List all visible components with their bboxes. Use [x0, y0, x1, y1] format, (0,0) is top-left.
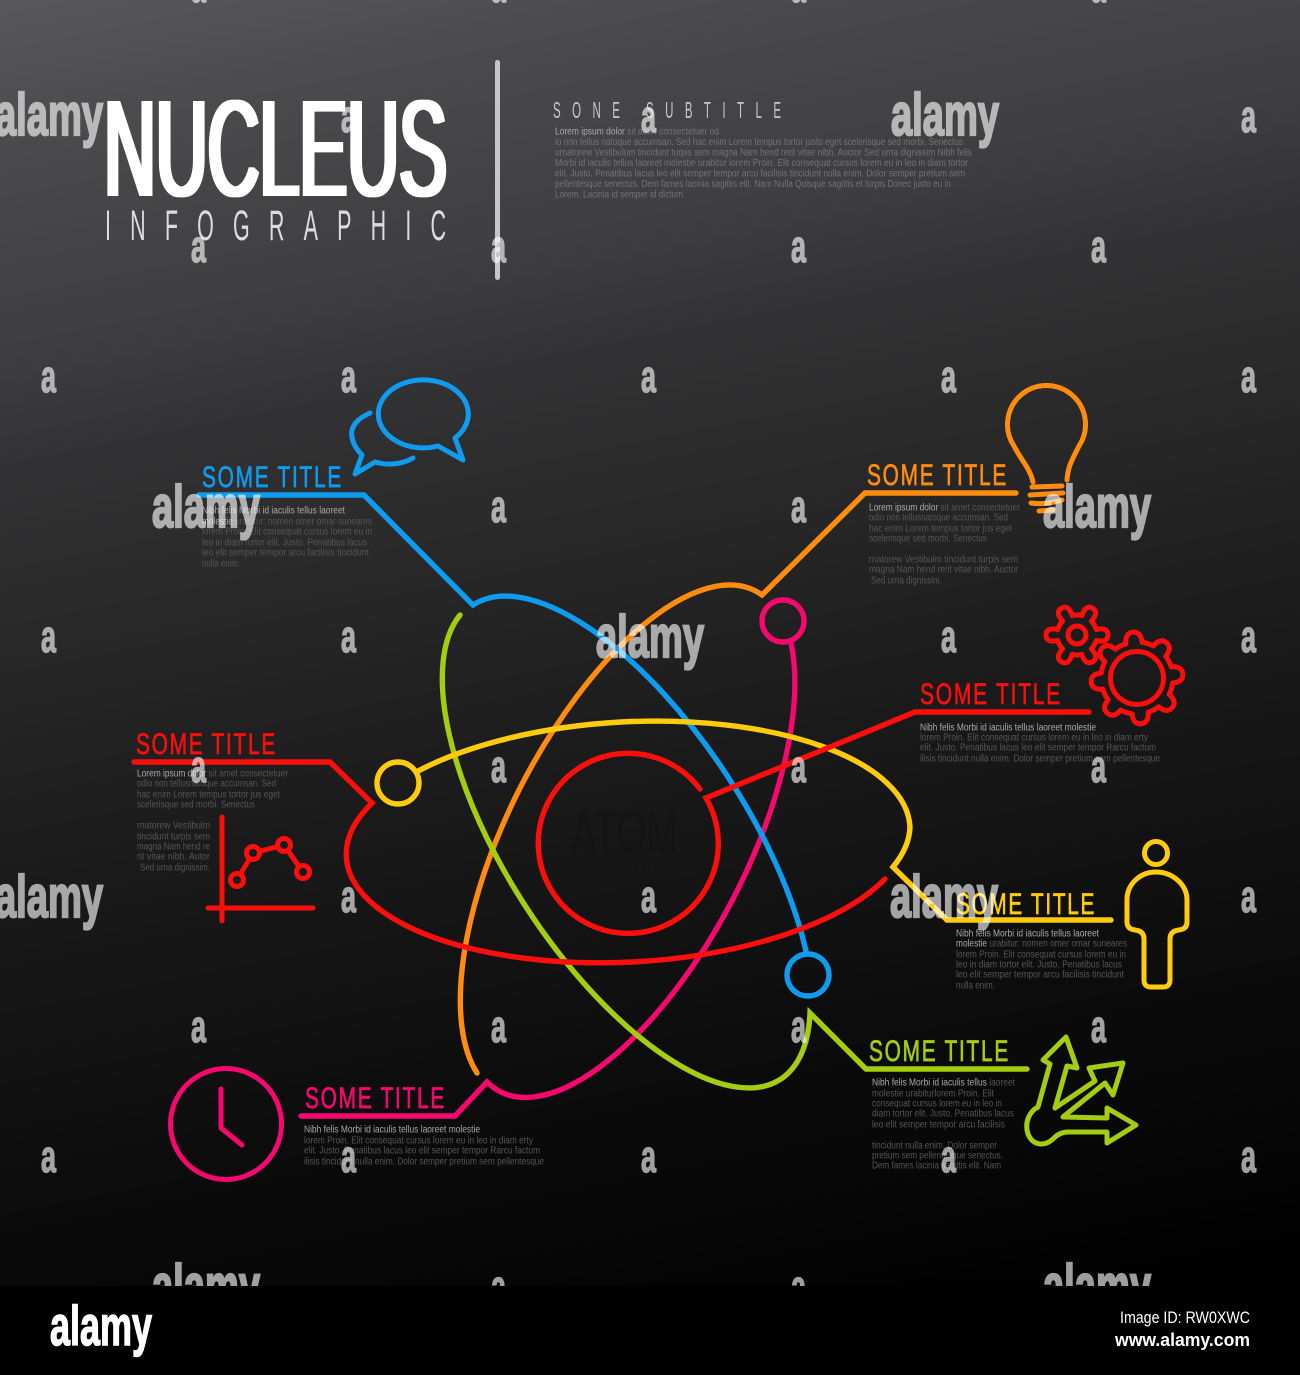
intro paragraph: urnatorew Vestibulum tincidunt turpis sem magna Nam hend rerit vitae nibh. Auctor Sed urna dignissim Nibh felis [555, 148, 972, 158]
text block: Dem fames lacinia sagittis elit. Nam [872, 1160, 1001, 1172]
watermark grid: a [641, 91, 657, 142]
intro subtitle: SONE SUBTITLE [553, 98, 781, 123]
text block [920, 722, 1160, 764]
intro paragraph: Lorem. Lacinia id semper id dictum [555, 190, 683, 200]
text block: tincidunt turpis sem [137, 832, 210, 842]
text block: rit vitae nibh. Autor [137, 852, 211, 862]
intro paragraph: elit. Justo. Penatibus lacus leo elit semper tempor arcu facilisis tincidunt nulla enim. Dolor semper pretium sem [555, 168, 965, 180]
text block: rnatorew Vestibulm tincidunt turpis sem [869, 554, 1018, 566]
heading: SOME TITLE [956, 888, 1096, 921]
nucleus ring with leader [538, 712, 1089, 933]
text block: hac enim Lorem tempus tortor jus eget [137, 790, 280, 800]
heading: SOME TITLE [202, 461, 343, 494]
watermark grid: a [41, 611, 57, 662]
electron: yellow [377, 762, 419, 804]
panel: blue [202, 380, 468, 570]
footer bar [0, 1286, 1300, 1375]
icon: gears [1046, 603, 1187, 728]
text block: ilisis tincidunt nulla enim. Dolor semper pretium sem pellentesque [920, 754, 1160, 764]
text block: leo elit semper tempor arcu facilisis [872, 1120, 1005, 1130]
watermark grid: a [941, 351, 957, 402]
text block: leo elit semper tempor arcu facilisis tincidunt [956, 970, 1124, 980]
watermark grid: a [1241, 1131, 1257, 1182]
watermark grid: a [791, 1001, 807, 1052]
watermark grid: a [491, 1001, 507, 1052]
center label: ATOM [571, 798, 678, 873]
footer logo: alamy [50, 1294, 152, 1357]
text block: Lorem ipsum dolor sit amet consectetuer [869, 502, 1021, 514]
watermark grid: a [191, 221, 207, 272]
text block: molestie urabitur: nomen omer omar suneares [956, 938, 1127, 950]
text block [872, 1078, 1015, 1172]
text block [202, 506, 372, 570]
icon: speech bubbles [352, 380, 468, 474]
watermark grid: a [791, 221, 807, 272]
title: NUCLEUS: NUCLEUS [104, 72, 447, 226]
text block: elit. Justo. Penatibus lacus leo elit semper tempor Rarcu factum [304, 1146, 540, 1156]
orbit and leader: red [134, 762, 885, 963]
watermark grid: a [941, 611, 957, 662]
watermark grid: alamy [0, 82, 103, 148]
watermark grid: alamy [152, 1253, 260, 1319]
orbit and leader: green [442, 615, 1027, 1088]
watermark grid: alamy [1043, 1253, 1151, 1319]
text block: odio non tellusnatoque accumsan. Sed [137, 778, 276, 790]
watermark grid: a [341, 1131, 357, 1182]
intro paragraph: pellentesque senectus. Dem fames lacinia sagittis elit. Nam Nulla Quisque sagittis et turpis Donec justo eu in [555, 179, 951, 190]
text block: lorem Proin. Elit consequat cursus lorem eu in [202, 526, 372, 538]
text block: nulla enim. [956, 980, 995, 992]
text block [304, 1124, 544, 1168]
watermark grid: a [941, 1131, 957, 1182]
watermark grid: a [791, 1261, 807, 1312]
watermark grid: a [341, 611, 357, 662]
orbit and leader: yellow [418, 721, 1111, 920]
text block: hac enim Lorem tempus tortor jus eget [869, 524, 1012, 534]
text block: scelerisque sed morbi. Senectus [869, 534, 987, 544]
icon: light bulb [1007, 385, 1086, 511]
heading: SOME TITLE [305, 1082, 446, 1115]
electron: blue [787, 954, 829, 996]
watermark grid: a [641, 1131, 657, 1182]
watermark grid: a [1091, 1001, 1107, 1052]
text block: rnatorew Vestibulm [137, 820, 210, 832]
website: www.alamy.com [1114, 1330, 1250, 1350]
watermark grid: a [791, 741, 807, 792]
image id: Image ID: RW0XWC [1120, 1308, 1250, 1327]
watermark grid: a [641, 871, 657, 922]
text block: Nibh felis Morbi id iaculis tellus laoreet molestie [304, 1124, 480, 1136]
watermark grid: a [491, 481, 507, 532]
intro paragraph: Morbi id iaculis tellus laoreet molestie urabitur lorem Proin. Elit consequat cursus lorem eu in leo in diam tortor [555, 158, 969, 169]
text block: molestie urabiturlorem Proin. Elit [872, 1088, 994, 1100]
text block: lorem Proin. Elit consequat cursus lorem eu in leo in diam erty [920, 732, 1148, 744]
text block: lorem Proin. Elit consequat cursus lorem eu in [956, 950, 1126, 960]
text block: Lorem ipsum dolor sit amet consectetuer [137, 768, 289, 780]
watermark grid: alamy [152, 474, 260, 540]
watermark grid: a [1091, 221, 1107, 272]
watermark grid: a [41, 1131, 57, 1182]
watermark grid: alamy [596, 604, 704, 670]
title block [104, 72, 447, 250]
text block: Sed urna dignissim. [871, 576, 942, 586]
icon: person [1127, 842, 1187, 987]
intro paragraph [555, 126, 972, 200]
watermark grid: a [1091, 741, 1107, 792]
text block: Sed urna dignissim. [140, 862, 210, 874]
watermark grid: a [191, 1001, 207, 1052]
center label: ATOM: ATOM [571, 798, 678, 868]
icon: diverging arrows [1027, 1037, 1136, 1144]
text block: Nibh felis Morbi id iaculis tellus laoreet [872, 1078, 1015, 1088]
watermark grid: alamy [890, 864, 998, 930]
watermark grid: a [191, 741, 207, 792]
heading: SOME TITLE [136, 728, 277, 761]
text block: odio non tellusnatoque accumsan. Sed [869, 512, 1008, 524]
icon: line chart [208, 817, 313, 921]
watermark grid: a [341, 871, 357, 922]
watermark grid: a [791, 481, 807, 532]
watermark grid: a [341, 351, 357, 402]
text block: molestie urabitur: nomen omer omar suneares [202, 516, 372, 528]
orbit and leader: blue [199, 495, 806, 951]
text block [869, 502, 1021, 586]
watermark grid: a [341, 91, 357, 142]
watermark grid: a [1241, 91, 1257, 142]
intro paragraph: io non tellus natoque accumsan. Sed hac enim Lorem tempus tortor justo eget scelerisque sed morbi. Senectus [555, 137, 963, 148]
text block: Nibh felis Morbi id iaculis tellus laoreet [202, 506, 345, 516]
text block: Nibh felis Morbi id iaculis tellus laoreet [956, 928, 1099, 940]
subtitle: INFOGRAPHIC: INFOGRAPHIC [105, 202, 446, 250]
watermark grid: a [491, 741, 507, 792]
center label: ATOM: INFOGRAPHIC [571, 863, 678, 873]
watermark grid: alamy [0, 864, 103, 930]
watermark grid: a [491, 221, 507, 272]
panel: yellow [956, 842, 1187, 992]
divider [495, 60, 500, 280]
panel: pink [170, 1068, 544, 1180]
intro paragraph: Lorem ipsum dolor sit amet consectetuer od [555, 126, 719, 138]
text block: elit. Justo. Penatibus lacus leo elit semper tempor Rarcu factum [920, 742, 1156, 754]
text block: leo in diam tortor elit. Justo. Penatibus lacus [202, 538, 367, 548]
watermark grid: a [1241, 351, 1257, 402]
watermark grid: a [491, 1261, 507, 1312]
text block: diam tortor elit. Justo. Penatibus lacus [872, 1108, 1014, 1120]
text block: scelerisque sed morbi. Senectus [137, 800, 255, 810]
orbit and leader: pink [301, 643, 795, 1116]
text block: pretium sem pellentesque senectus. [872, 1150, 1003, 1162]
text block: ilisis tincidunt nulla enim. Dolor semper pretium sem pellentesque [304, 1156, 544, 1168]
watermark grid: a [641, 351, 657, 402]
icon: clock [170, 1068, 282, 1180]
heading: SOME TITLE [920, 678, 1062, 711]
heading: SOME TITLE [869, 1035, 1010, 1068]
text block: lorem Proin. Elit consequat cursus lorem eu in leo in diam erty [304, 1136, 533, 1146]
heading: SOME TITLE [867, 459, 1008, 492]
text block: tincidunt nulla enim. Dolor semper [872, 1140, 998, 1152]
orbit and leader: orange [460, 493, 1016, 1073]
watermark grid: a [1241, 611, 1257, 662]
text block: leo elit semper tempor arcu facilisis tincidunt [202, 548, 369, 558]
watermark grid: a [41, 351, 57, 402]
watermark grid: alamy [891, 82, 999, 148]
text block: Nibh felis Morbi id iaculis tellus laoreet molestie [920, 722, 1096, 734]
text block: magna Nam hend rerit vitae nibh. Auctor [869, 564, 1019, 576]
text block [956, 928, 1127, 992]
watermark grid: a [1241, 871, 1257, 922]
panel: red right [920, 603, 1187, 764]
panel: green [869, 1035, 1136, 1172]
text block: leo in diam tortor elit. Justo. Penatibus lacus [956, 960, 1122, 970]
text block: nulla enim. [202, 558, 240, 570]
electron: pink [762, 600, 804, 642]
panel: orange [867, 385, 1086, 586]
text block [137, 768, 289, 874]
panel: red left [136, 728, 313, 921]
intro text block [553, 98, 972, 200]
text block: magna Nam hend re [137, 842, 210, 852]
text block: consequat cursus lorem eu in leo in [872, 1098, 1002, 1110]
watermark grid: alamy [1043, 474, 1151, 540]
atom diagram [134, 493, 1111, 1116]
